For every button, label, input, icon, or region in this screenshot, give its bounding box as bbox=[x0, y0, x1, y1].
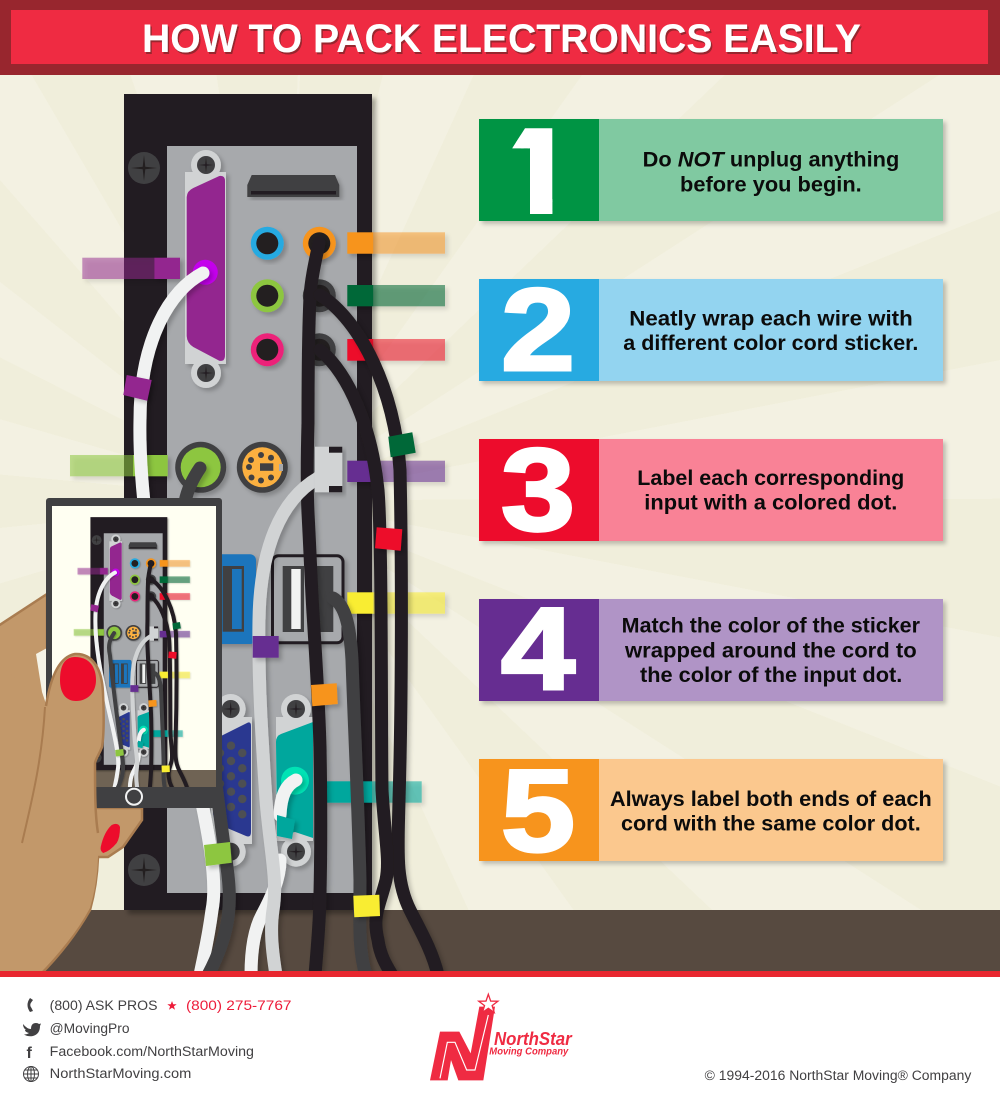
PS/2 green port bbox=[175, 442, 226, 493]
parallel port bbox=[185, 150, 226, 388]
step 1 number bbox=[512, 128, 552, 214]
step 4 text: Match the color of the sticker bbox=[622, 614, 920, 637]
blue VGA port bbox=[211, 694, 252, 867]
step 5 text: Always label both ends of each bbox=[610, 788, 932, 811]
tape: red bbox=[347, 339, 445, 361]
step 1 text: before you begin. bbox=[680, 174, 862, 197]
tape: orange bbox=[347, 232, 445, 254]
step 4 text: wrapped around the cord to bbox=[624, 639, 917, 662]
step 5 panel bbox=[479, 745, 943, 876]
step 4 text: the color of the input dot. bbox=[640, 664, 902, 687]
tape: lime left bbox=[70, 455, 168, 476]
blue USB port bbox=[184, 554, 256, 644]
footer background bbox=[0, 972, 1000, 1100]
VGA plug connector bbox=[315, 447, 342, 492]
icon: bottom left screw bbox=[128, 854, 160, 886]
hand thumb bbox=[0, 654, 120, 972]
sticker: lime bbox=[204, 842, 232, 866]
step 2 text bbox=[623, 307, 918, 355]
logo subtitle: Moving Company bbox=[489, 1046, 569, 1058]
step 4 number: 4 bbox=[501, 583, 575, 714]
step 3 text: input with a colored dot. bbox=[644, 491, 897, 514]
HDMI port bbox=[247, 175, 339, 197]
icon: thumb nail bbox=[60, 657, 96, 701]
cord: white from teal port lower run bbox=[251, 860, 280, 975]
tape: purple left bbox=[82, 258, 180, 279]
hand palm bbox=[0, 594, 142, 975]
footer contacts bbox=[23, 998, 292, 1082]
purple port dot bbox=[193, 260, 218, 285]
cord: white from parallel port bbox=[140, 273, 214, 975]
logo bbox=[430, 994, 573, 1080]
icon: finger nail bbox=[101, 824, 120, 853]
footer red line bbox=[0, 971, 1000, 977]
facebook address: Facebook.com/NorthStarMoving bbox=[50, 1044, 254, 1059]
step 3 text: Label each corresponding bbox=[637, 467, 904, 490]
sticker: red bbox=[375, 527, 402, 551]
step 2 text: Neatly wrap each wire with bbox=[629, 307, 913, 330]
sticker: orange bbox=[311, 683, 338, 706]
teal VGA port bbox=[276, 694, 313, 867]
icon: twitter bbox=[23, 1023, 41, 1036]
twitter handle: @MovingPro bbox=[50, 1021, 130, 1036]
cord: black from green-labelled jack bbox=[320, 295, 438, 975]
step 3 number: 3 bbox=[501, 424, 575, 555]
label tapes bbox=[70, 232, 445, 803]
cord: light grey from VGA connector bbox=[259, 478, 318, 975]
thumb crease bbox=[22, 707, 45, 843]
PS/2 orange port bbox=[237, 442, 288, 493]
step 3 text bbox=[637, 467, 904, 514]
sticker: yellow bbox=[353, 895, 380, 917]
header bar bbox=[0, 0, 1000, 75]
tape: purple right bbox=[347, 461, 445, 482]
title: HOW TO PACK ELECTRONICS EASILY bbox=[142, 17, 861, 61]
icon: globe bbox=[24, 1066, 38, 1082]
black panel bbox=[124, 94, 372, 910]
tape: dark green bbox=[347, 285, 445, 306]
step 4 text bbox=[622, 614, 920, 687]
step 1 text bbox=[643, 149, 899, 197]
website: NorthStarMoving.com bbox=[50, 1066, 191, 1081]
sticker: purple on white cord bbox=[123, 375, 152, 401]
cord: black from red-labelled jack bbox=[320, 350, 392, 975]
white USB port bbox=[272, 556, 343, 643]
step 4 panel bbox=[479, 583, 943, 714]
cord stickers bbox=[123, 375, 416, 917]
step 5 number: 5 bbox=[501, 745, 575, 876]
computer back panel scene bbox=[70, 94, 445, 975]
phone number digits: (800) 275-7767 bbox=[186, 998, 292, 1013]
floor bbox=[0, 910, 1000, 972]
sticker: teal bbox=[277, 815, 295, 839]
grey plate bbox=[167, 146, 357, 893]
cord: dark grey from white USB bbox=[333, 598, 366, 975]
cord: dark grey from green port bbox=[184, 468, 229, 975]
step 5 text: cord with the same color dot. bbox=[621, 813, 921, 836]
step 1 panel bbox=[479, 119, 948, 226]
icon: phone bbox=[28, 998, 33, 1012]
icon: top left screw bbox=[128, 152, 160, 184]
sticker: purple on grey cord bbox=[253, 636, 279, 658]
logo N mark bbox=[430, 994, 498, 1080]
step 2 panel bbox=[479, 264, 943, 395]
tape: teal bbox=[325, 781, 422, 803]
logo name: NorthStar bbox=[494, 1029, 573, 1049]
header inner bbox=[11, 10, 988, 64]
phone bbox=[46, 498, 222, 808]
phone number words: (800) ASK PROS bbox=[50, 998, 158, 1013]
home button bbox=[126, 789, 142, 805]
audio jacks bbox=[251, 227, 336, 366]
cord: white from teal port bbox=[280, 780, 296, 815]
step 1 number: 1 bbox=[500, 106, 566, 238]
step 2 number: 2 bbox=[501, 264, 575, 395]
step 1 text: Do NOT unplug anything bbox=[643, 149, 899, 172]
step 5 text bbox=[610, 788, 932, 836]
teal port dot bbox=[281, 767, 309, 795]
sticker: green on black cord bbox=[388, 432, 416, 457]
cords bbox=[140, 243, 438, 975]
step 2 text: a different color cord sticker. bbox=[623, 332, 918, 355]
tape: yellow bbox=[347, 592, 445, 614]
copyright: © 1994-2016 NorthStar Moving® Company bbox=[705, 1068, 972, 1083]
icon: star bbox=[167, 1001, 177, 1010]
phone screen bbox=[52, 506, 216, 790]
cord: black from orange jack bbox=[307, 243, 321, 975]
icon: facebook: f bbox=[26, 1045, 32, 1062]
phone body bbox=[46, 498, 222, 808]
step 3 panel bbox=[479, 424, 943, 555]
